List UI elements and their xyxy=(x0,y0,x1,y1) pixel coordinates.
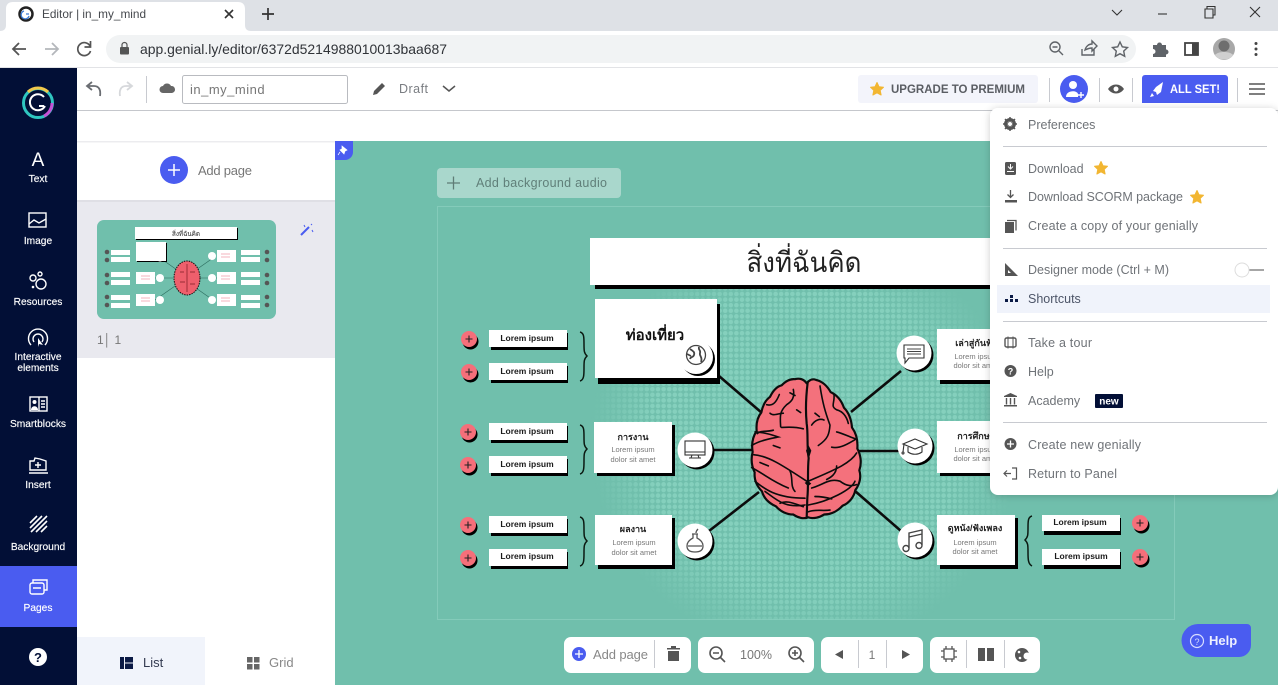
icon: undo xyxy=(87,82,100,96)
icon: preview eye xyxy=(1108,84,1124,94)
box: storytelling xyxy=(937,329,1018,384)
view tabs xyxy=(77,637,294,685)
add page header: Add page xyxy=(198,163,252,178)
icon: monitor xyxy=(678,432,714,470)
dropdown menu xyxy=(990,108,1278,495)
editor top toolbar xyxy=(0,68,1278,111)
icon: trash xyxy=(667,646,680,661)
tab title: Editor | in_my_mind xyxy=(42,7,146,21)
box: movies and music xyxy=(937,515,1018,569)
project name input: in_my_mind xyxy=(190,82,265,97)
icon: lock xyxy=(120,42,129,54)
box: results: ผลงาน xyxy=(620,524,647,534)
canvas background xyxy=(335,141,1278,685)
box: movies and music: dolor sit amet xyxy=(952,547,998,556)
menu item: return to panel: Return to Panel xyxy=(1028,467,1117,481)
tool: background xyxy=(11,516,66,553)
sidebar xyxy=(0,68,77,685)
box: work: การงาน xyxy=(618,432,649,442)
right bullet group: movies and music: Lorem ipsum xyxy=(1053,517,1107,527)
page thumbnail xyxy=(97,220,276,319)
box: storytelling: เล่าสู่กันฟัง xyxy=(955,338,997,349)
icon: tab favicon xyxy=(20,8,32,20)
selected page row xyxy=(77,200,335,358)
help button: Help xyxy=(1209,633,1237,648)
menu item: help: Help xyxy=(1028,365,1054,379)
help button xyxy=(1182,624,1251,657)
icon: close tab xyxy=(225,10,233,18)
box: work xyxy=(594,422,675,476)
icon: music note xyxy=(898,522,934,560)
tool: smartblocks xyxy=(10,397,66,430)
menu item: academy: new xyxy=(1099,396,1119,408)
tab: grid: Grid xyxy=(269,655,294,670)
browser tab strip xyxy=(0,0,1278,31)
tool: smartblocks: Smartblocks xyxy=(10,419,66,430)
box: education xyxy=(937,421,1018,476)
tool: image xyxy=(24,213,52,247)
tool: text xyxy=(29,150,48,185)
menu item: preferences xyxy=(1003,117,1095,132)
add page header xyxy=(160,156,252,184)
tool: interactive elements xyxy=(14,329,62,374)
icon: hamburger menu xyxy=(1249,84,1265,94)
bottom toolbar: pagination xyxy=(821,637,923,673)
help button: ? xyxy=(1194,637,1200,647)
menu item: preferences: Preferences xyxy=(1028,118,1095,132)
all set button xyxy=(1142,75,1228,103)
tool: background: Background xyxy=(11,542,66,553)
left bullet group: travel: Lorem ipsum xyxy=(500,333,554,343)
menu item: academy: Academy xyxy=(1028,394,1081,408)
icon: back arrow xyxy=(13,43,26,55)
icon: globe xyxy=(679,340,715,376)
icon: pin tab xyxy=(335,141,353,160)
tool: insert: Insert xyxy=(25,480,51,491)
icon: chevron xyxy=(443,86,455,91)
connector lines xyxy=(709,370,901,531)
icon: graduation cap xyxy=(898,428,934,466)
box: travel: ท่องเที่ยว xyxy=(626,324,684,344)
menu item: help: ? xyxy=(1008,366,1013,376)
tool: resources xyxy=(14,272,62,308)
brain illustration xyxy=(752,379,861,518)
left bullet group: results: Lorem ipsum xyxy=(500,551,554,561)
pages panel xyxy=(77,111,335,685)
tool: pages (active) xyxy=(0,566,77,627)
bottom toolbar: zoom xyxy=(698,637,814,673)
tool: resources: Resources xyxy=(14,297,62,308)
page number: 1│ 1 xyxy=(97,333,122,348)
menu item: shortcuts xyxy=(1005,292,1081,306)
menu item: download xyxy=(1005,162,1108,176)
left bullet group: results xyxy=(460,516,587,569)
toggle xyxy=(1235,263,1264,277)
tool: image: Image xyxy=(24,236,52,247)
box: education: dolor sit amet xyxy=(953,454,999,463)
box: results xyxy=(595,515,675,569)
box: work: Lorem ipsum xyxy=(611,445,655,454)
menu item: shortcuts: Shortcuts xyxy=(1028,292,1081,306)
left bullet group: work: Lorem ipsum xyxy=(500,426,554,436)
right bullet group: movies and music: Lorem ipsum xyxy=(1054,551,1108,561)
left bullet group: travel: Lorem ipsum xyxy=(500,366,554,376)
box: movies and music: ดูหนัง/ฟังเพลง xyxy=(948,523,1002,534)
box: storytelling: Lorem ipsum xyxy=(954,352,998,361)
menu item: copy: Create a copy of your genially xyxy=(1028,219,1199,233)
icon: reload xyxy=(78,41,90,56)
icon: flask xyxy=(678,524,714,560)
menu item: create new: Create new genially xyxy=(1028,438,1142,452)
icon: new tab xyxy=(262,8,274,20)
box: movies and music: Lorem ipsum xyxy=(953,538,997,547)
menu item: help xyxy=(1004,365,1054,379)
menu item: download scorm: Download SCORM package xyxy=(1028,190,1183,204)
icon: cloud saved xyxy=(160,84,175,93)
bottom toolbar: pagination: 1 xyxy=(869,648,876,662)
logo xyxy=(24,88,52,118)
window controls xyxy=(1112,6,1260,18)
url pill xyxy=(106,35,1136,63)
tab: grid xyxy=(247,655,294,670)
bottom toolbar: view tools xyxy=(930,637,1040,673)
box: work: dolor sit amet xyxy=(610,455,656,464)
box: travel xyxy=(595,299,720,384)
tool: pages (active): Pages xyxy=(24,603,52,614)
menu item: download: Download xyxy=(1028,162,1084,176)
menu item: designer mode: Designer mode (Ctrl + M) xyxy=(1028,263,1169,277)
add background audio button xyxy=(437,168,621,198)
slide xyxy=(438,206,1174,620)
left bullet group: travel xyxy=(461,330,587,383)
tool: interactive elements: Interactive xyxy=(14,352,62,363)
bottom toolbar: page actions: Add page xyxy=(593,647,648,662)
title banner: สิ่งที่ฉันคิด xyxy=(746,243,862,278)
url text: app.genial.ly/editor/6372d5214988010013baa687 xyxy=(140,41,447,57)
left bullet group: work: Lorem ipsum xyxy=(500,459,554,469)
browser action icons xyxy=(1050,38,1258,60)
tool: insert xyxy=(25,458,51,491)
share user button xyxy=(1060,75,1088,103)
tool: text: A xyxy=(32,150,45,171)
bottom toolbar: zoom: 100% xyxy=(740,648,772,662)
left bullet group: results: Lorem ipsum xyxy=(500,519,554,529)
icon: magic wand xyxy=(301,224,313,235)
tab: list: List xyxy=(143,655,164,670)
title banner xyxy=(590,238,1022,289)
icon: help xyxy=(29,648,47,666)
box: education: Lorem ipsum xyxy=(954,445,998,454)
add background audio button: Add background audio xyxy=(476,176,607,190)
page thumbnail: สิ่งที่ฉันคิด xyxy=(172,229,200,238)
tool: text: Text xyxy=(29,174,48,185)
bottom toolbar: page actions xyxy=(564,637,691,673)
browser address bar xyxy=(0,31,1278,68)
icon: help: ? xyxy=(34,650,42,665)
box: education: การศึกษา xyxy=(957,431,995,441)
icon: pencil xyxy=(373,83,385,95)
all set button: ALL SET! xyxy=(1170,82,1220,96)
project name input xyxy=(182,76,348,104)
box: results: Lorem ipsum xyxy=(612,538,656,547)
menu item: take a tour: Take a tour xyxy=(1028,336,1092,350)
tool: interactive elements: elements xyxy=(17,363,59,374)
left bullet group: work xyxy=(460,423,587,476)
menu item: academy xyxy=(1004,393,1123,408)
upgrade button xyxy=(858,75,1038,103)
halftone pattern xyxy=(617,289,990,619)
icon: redo xyxy=(120,82,132,96)
icon: forward arrow xyxy=(45,43,58,55)
box: results: dolor sit amet xyxy=(611,548,657,557)
icon: speech bubble xyxy=(896,336,934,372)
box: storytelling: dolor sit amet xyxy=(953,361,999,370)
right bullet group: movies and music xyxy=(1025,515,1150,569)
draft status: Draft xyxy=(399,82,429,96)
tab: list xyxy=(120,655,164,670)
upgrade button: UPGRADE TO PREMIUM xyxy=(891,82,1025,96)
menu item: designer mode xyxy=(1005,263,1264,277)
